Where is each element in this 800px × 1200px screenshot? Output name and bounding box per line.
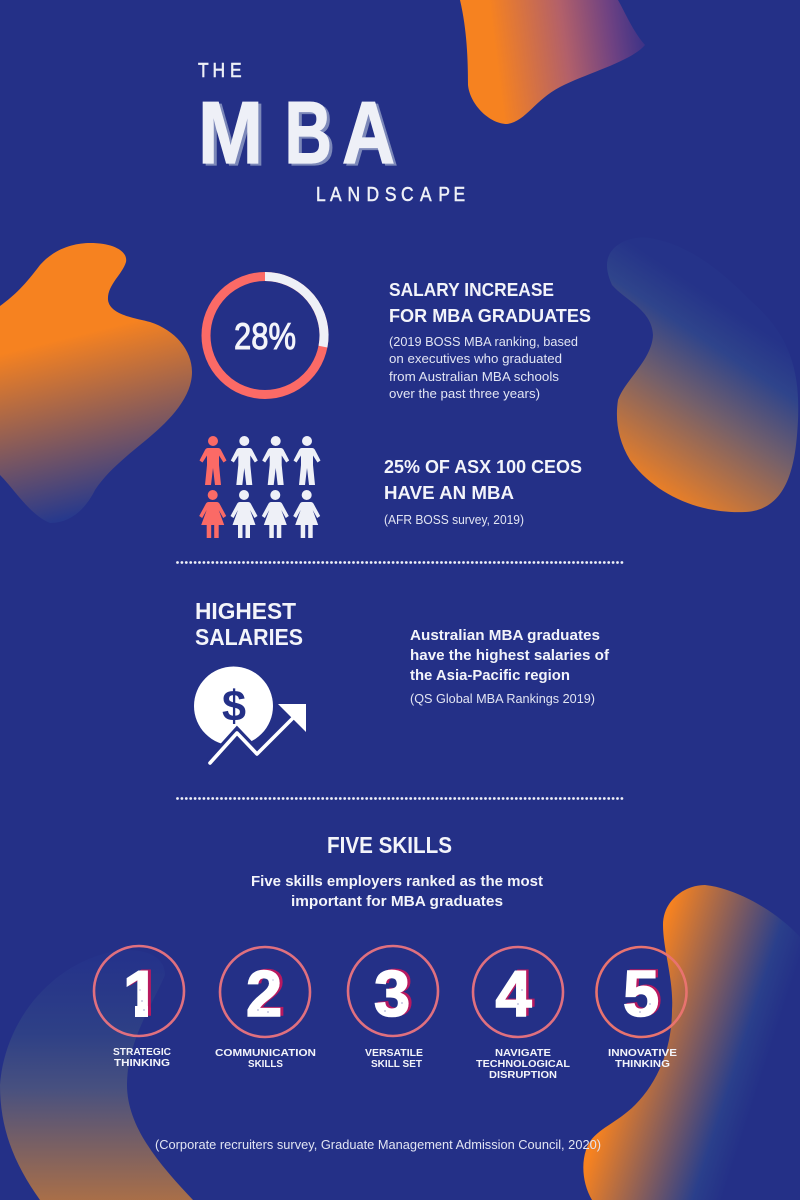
title <box>198 60 465 206</box>
heading: highest salaries <box>195 598 303 650</box>
title word: MBA <box>198 83 398 184</box>
heading: five skills: FIVE SKILLS <box>327 832 452 858</box>
blob: bottom left <box>0 950 193 1200</box>
skill 2: communication skills: 2 <box>246 957 282 1030</box>
skill 3: versatile skill set: SKILL SET <box>371 1058 423 1070</box>
skill 5: innovative thinking: THINKING <box>615 1058 670 1070</box>
skill 2: communication skills <box>215 947 316 1070</box>
heading: highest salaries: SALARIES <box>195 624 303 650</box>
skill 4: navigate technological disruption: 4 <box>498 956 534 1029</box>
text block: salary increase: FOR MBA GRADUATES <box>389 305 591 326</box>
skill 2: communication skills: SKILLS <box>248 1058 283 1070</box>
skill 5: innovative thinking <box>596 947 686 1070</box>
text block: five skills intro <box>251 874 543 910</box>
blob: top orange <box>460 0 645 124</box>
blob: right blue to orange <box>607 237 798 512</box>
text block: Asia-Pacific salaries <box>410 628 609 706</box>
text block: Asia-Pacific salaries: the Asia-Pacific region <box>410 668 570 684</box>
skill 5: innovative thinking: 5 <box>623 957 659 1030</box>
text block: ASX CEOs: HAVE AN MBA <box>384 482 514 503</box>
skill 4: navigate technological disruption: NAVIGATE <box>495 1047 551 1059</box>
text block: salary increase: over the past three years) <box>389 386 540 401</box>
skill 5: innovative thinking: 5 <box>626 956 662 1029</box>
text block: ASX CEOs: (AFR BOSS survey, 2019) <box>384 512 524 527</box>
title word: MBA: A <box>342 83 395 182</box>
text block: salary increase: from Australian MBA schools <box>389 369 560 384</box>
skill 4: navigate technological disruption <box>473 947 571 1081</box>
text block: five skills intro: important for MBA graduates <box>291 894 503 910</box>
text block: Asia-Pacific salaries: (QS Global MBA Rankings 2019) <box>410 691 595 706</box>
skill 2: communication skills: COMMUNICATION <box>215 1047 316 1059</box>
text block: ASX CEOs <box>384 456 582 527</box>
donut value: 28% <box>234 316 296 357</box>
title line: THE: THE <box>198 60 242 82</box>
text block: salary increase: SALARY INCREASE <box>389 279 554 300</box>
skill 4: navigate technological disruption: DISRUPTION <box>489 1069 557 1081</box>
pictogram: 25% of CEOs <box>199 436 320 538</box>
blob: left orange <box>0 243 192 523</box>
title word: MBA: M <box>201 85 266 184</box>
title line: LANDSCAPE: LANDSCAPE <box>316 184 465 206</box>
skill 5: innovative thinking: INNOVATIVE <box>608 1047 677 1059</box>
text block: ASX CEOs: 25% OF ASX 100 CEOS <box>384 456 582 477</box>
skill 1: strategic thinking: STRATEGIC <box>113 1046 171 1058</box>
title word: MBA: A <box>345 85 398 184</box>
skill 4: navigate technological disruption: TECHNOLOGICAL <box>476 1058 571 1070</box>
blob: bottom right <box>583 885 800 1200</box>
skill 3: versatile skill set: VERSATILE <box>365 1047 423 1059</box>
title word: MBA: B <box>284 83 332 182</box>
icon: women row <box>199 490 320 538</box>
icon: men row <box>200 436 320 485</box>
title word: MBA: M <box>198 83 263 182</box>
text block: salary increase: on executives who graduated <box>389 351 562 366</box>
skill 1: strategic thinking <box>94 946 184 1069</box>
skill 3: versatile skill set <box>348 946 438 1070</box>
icon: dollar coin with rising arrow: $ <box>222 682 246 731</box>
source note: (Corporate recruiters survey, Graduate Management Admission Council, 2020) <box>155 1137 601 1152</box>
icon: dollar coin with rising arrow <box>194 666 309 780</box>
skill 2: communication skills: 2 <box>249 956 285 1029</box>
skill 3: versatile skill set: 3 <box>377 956 413 1029</box>
title word: MBA: B <box>288 85 335 184</box>
skill 1: strategic thinking: 1 <box>123 957 159 1030</box>
text block: salary increase <box>389 279 591 401</box>
donut chart: 28% <box>206 276 324 394</box>
skill 1: strategic thinking: 1 <box>126 956 162 1029</box>
text block: five skills intro: Five skills employers ranked as the most <box>251 874 543 890</box>
skill 3: versatile skill set: 3 <box>374 957 410 1030</box>
skill 1: strategic thinking: THINKING <box>114 1057 170 1069</box>
skill 4: navigate technological disruption: 4 <box>496 957 532 1030</box>
text block: salary increase: (2019 BOSS MBA ranking, based <box>389 334 578 349</box>
heading: highest salaries: HIGHEST <box>195 598 296 624</box>
text block: Asia-Pacific salaries: Australian MBA graduates <box>410 628 600 644</box>
text block: Asia-Pacific salaries: have the highest salaries of <box>410 648 609 664</box>
